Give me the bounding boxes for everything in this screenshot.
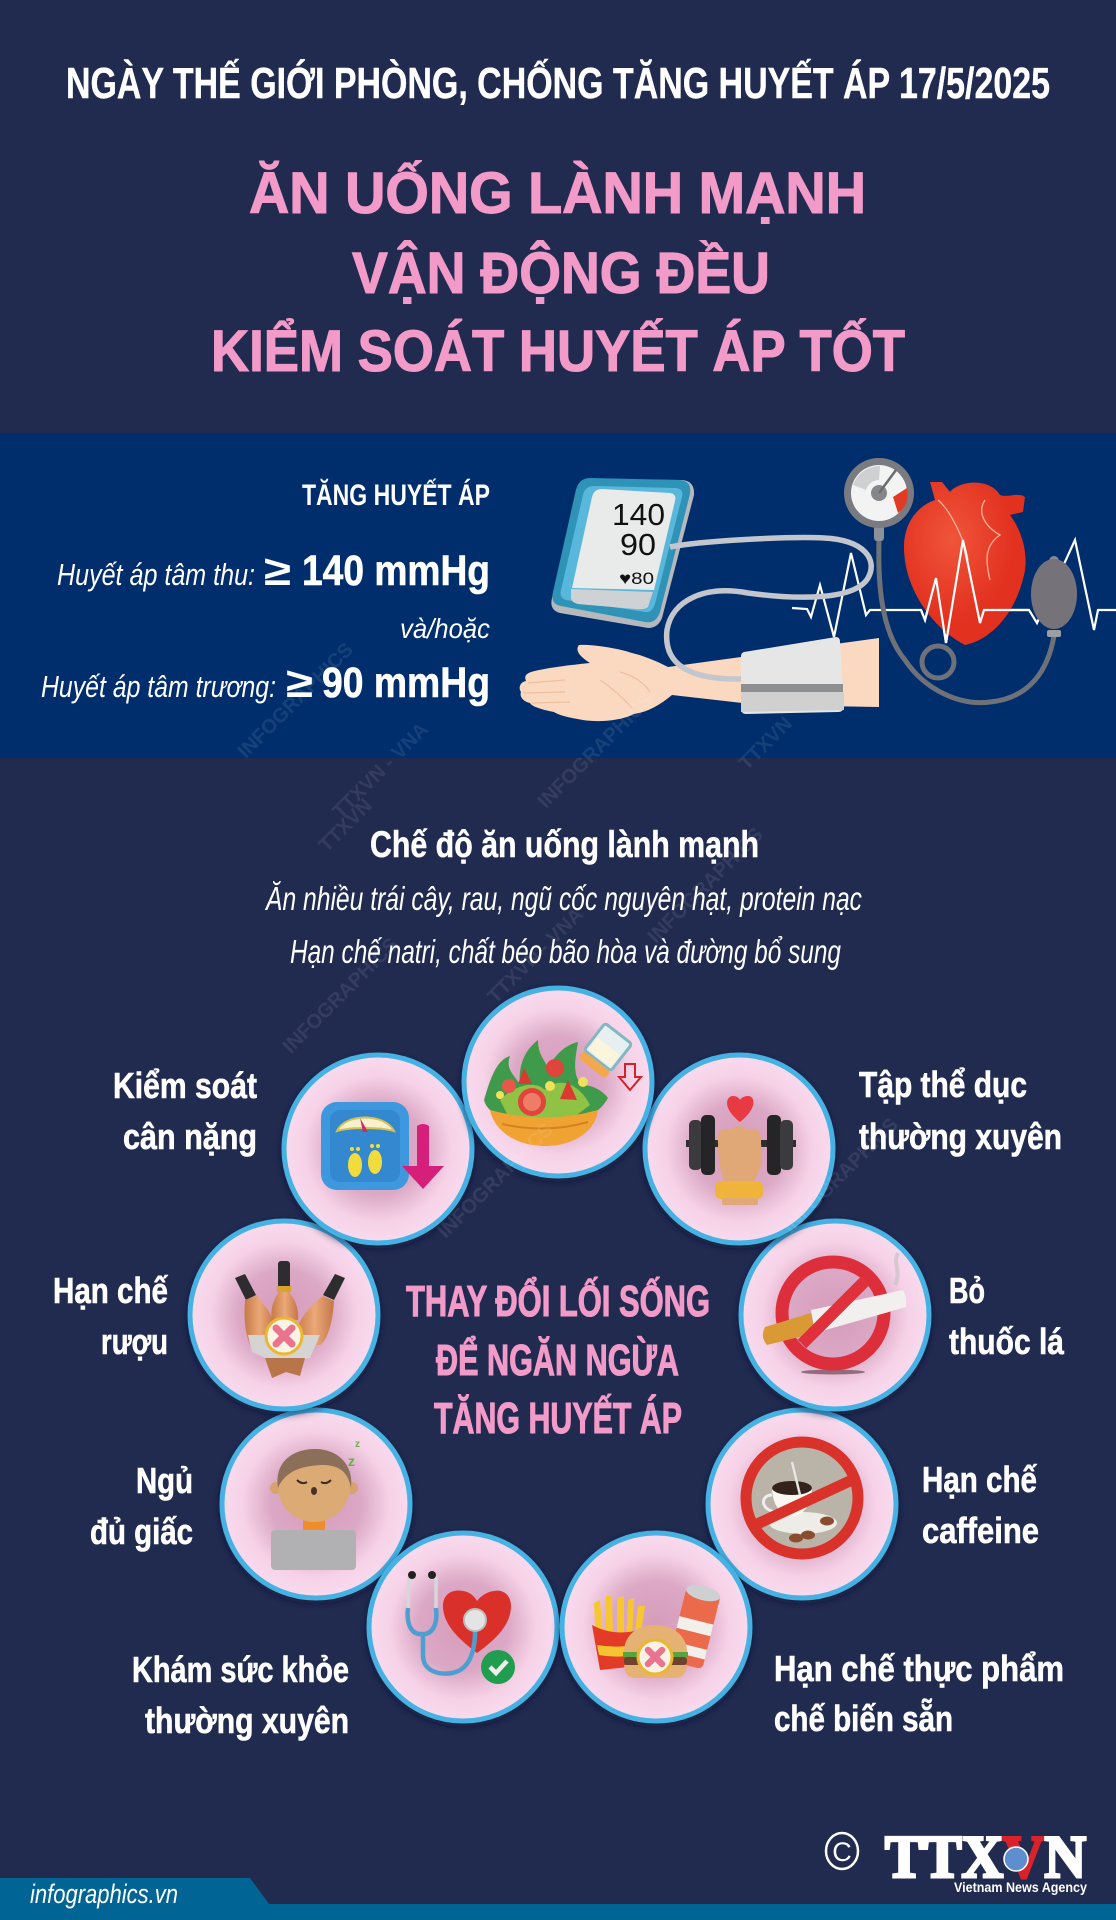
illustration: blood pressure measurement [520, 458, 1116, 721]
circle: processed food [562, 1533, 750, 1721]
heart [904, 482, 1029, 645]
label: limit alcohol [53, 1270, 169, 1362]
label: check-up: Khám sức khỏe [132, 1649, 349, 1690]
definition text: 140 mmHg [302, 547, 490, 595]
label: limit processed food: chế biến sẵn [774, 1697, 953, 1739]
logo: TTXVN: Vietnam News Agency [954, 1879, 1087, 1895]
center heading: THAY ĐỔI LỐI SỐNG [406, 1275, 710, 1326]
copyright mark: C [832, 1837, 852, 1867]
panel: lifestyle ring [53, 988, 1065, 1741]
tube loop [922, 646, 954, 678]
monitor readings: ♥80 [619, 569, 654, 588]
main title: KIỂM SOÁT HUYẾT ÁP TỐT [211, 319, 905, 384]
circle: exercise [645, 1055, 833, 1243]
label: check-up: thường xuyên [145, 1700, 349, 1741]
watermarks: TTXVN - VNA [484, 904, 588, 1008]
digital monitor [551, 478, 694, 628]
header [66, 57, 1050, 384]
website: infographics.vn [30, 1879, 178, 1909]
watermarks: INFOGRAPHICS [234, 639, 358, 763]
watermarks: TTXVN [315, 795, 377, 857]
circle: weight [284, 1055, 472, 1243]
watermarks: INFOGRAPHICS [644, 824, 768, 948]
main title [211, 161, 905, 384]
label: weight control: Kiểm soát [113, 1065, 257, 1106]
monitor tube [667, 538, 871, 679]
footer bar [0, 1878, 1116, 1920]
label: check-up [132, 1649, 349, 1741]
label: quit smoking [949, 1270, 1065, 1362]
label: sleep [90, 1460, 193, 1552]
arm and hand [520, 638, 879, 721]
circle: sleep [222, 1410, 410, 1598]
watermarks [234, 639, 903, 1243]
label: quit smoking: thuốc lá [949, 1321, 1065, 1362]
label: limit alcohol: rượu [101, 1321, 168, 1362]
diet tips [265, 880, 862, 970]
logo: TTXVN: TTXVN [885, 1824, 1086, 1890]
definition text [41, 478, 490, 707]
definition text: Huyết áp tâm trương: [41, 669, 276, 704]
monitor readings: 140 [612, 497, 665, 532]
watermarks: INFOGRAPHICS [434, 1119, 558, 1243]
icon: salad bowl with salt shaker [484, 1023, 641, 1146]
circle: check-up [369, 1533, 557, 1721]
watermarks: TTXVN [735, 713, 797, 775]
icon: wine bottles with X badge [235, 1261, 345, 1378]
icon: no caffeine sign [746, 1442, 858, 1554]
copyright mark [826, 1833, 858, 1869]
icon: no smoking sign [763, 1253, 906, 1374]
label: exercise [859, 1064, 1062, 1157]
label: limit caffeine [922, 1459, 1039, 1551]
center heading [406, 1275, 710, 1443]
globe [1004, 1847, 1028, 1871]
icon: sleeping person [270, 1439, 360, 1570]
watermarks: INFOGRAPHICS [279, 934, 403, 1058]
icon: sleeping person: z [348, 1453, 355, 1469]
monitor readings: 90 [620, 527, 656, 562]
panel: healthy diet [265, 824, 862, 970]
center heading: ĐỂ NGĂN NGỪA [436, 1334, 679, 1385]
icon: stethoscope, heart and check [408, 1571, 515, 1684]
pressure gauge [844, 458, 914, 541]
icon: fist with dumbbell and heart [686, 1096, 796, 1205]
definition text: ≥ [286, 659, 313, 706]
circle: alcohol [190, 1221, 378, 1409]
ecg line [792, 540, 1116, 643]
label: limit caffeine: caffeine [922, 1510, 1039, 1551]
definition text: và/hoặc [400, 613, 490, 644]
diet heading: Chế độ ăn uống lành mạnh [370, 824, 759, 865]
label: exercise: Tập thể dục [859, 1064, 1027, 1105]
label: limit processed food: Hạn chế thực phẩm [774, 1648, 1064, 1689]
definition text: 90 mmHg [322, 659, 490, 707]
cuff [741, 637, 844, 714]
label: limit caffeine: Hạn chế [922, 1459, 1038, 1500]
label: limit alcohol: Hạn chế [53, 1270, 169, 1311]
label: exercise: thường xuyên [859, 1116, 1062, 1157]
circle: smoking [741, 1221, 929, 1409]
circle: coffee [708, 1410, 896, 1598]
main title: VẬN ĐỘNG ĐỀU [352, 241, 770, 306]
main title: ĂN UỐNG LÀNH MẠNH [249, 161, 866, 226]
label: weight control [113, 1065, 257, 1157]
label: limit processed food [774, 1648, 1064, 1739]
icon: scale with down arrow [321, 1102, 444, 1190]
definition text: ≥ [264, 547, 291, 594]
down arrow [619, 1064, 641, 1090]
panel: hypertension definition band [0, 433, 1116, 758]
label: weight control: cân nặng [123, 1116, 257, 1157]
center heading: TĂNG HUYẾT ÁP [434, 1393, 682, 1443]
watermarks: INFOGRAPHICS [779, 1114, 903, 1238]
label: sleep: Ngủ [136, 1460, 193, 1501]
label: quit smoking: Bỏ [949, 1270, 985, 1311]
monitor readings [612, 497, 665, 588]
circle: diet [464, 988, 652, 1176]
label: sleep: đủ giấc [90, 1511, 193, 1552]
definition text: TĂNG HUYẾT ÁP [302, 478, 490, 512]
inflation bulb [1031, 556, 1077, 637]
icon: sleeping person: z [355, 1439, 360, 1450]
diet tips: Hạn chế natri, chất béo bão hòa và đường bổ sung [290, 933, 841, 970]
bulb tube [879, 540, 1054, 703]
watermarks: INFOGRAPHICS [534, 689, 658, 813]
icon: fast food with X badge [592, 1582, 722, 1678]
definition text: Huyết áp tâm thu: [57, 557, 255, 592]
watermarks: TTXVN - VNA [329, 719, 433, 823]
diet tips: Ăn nhiều trái cây, rau, ngũ cốc nguyên hạt, protein nạc [265, 880, 862, 917]
